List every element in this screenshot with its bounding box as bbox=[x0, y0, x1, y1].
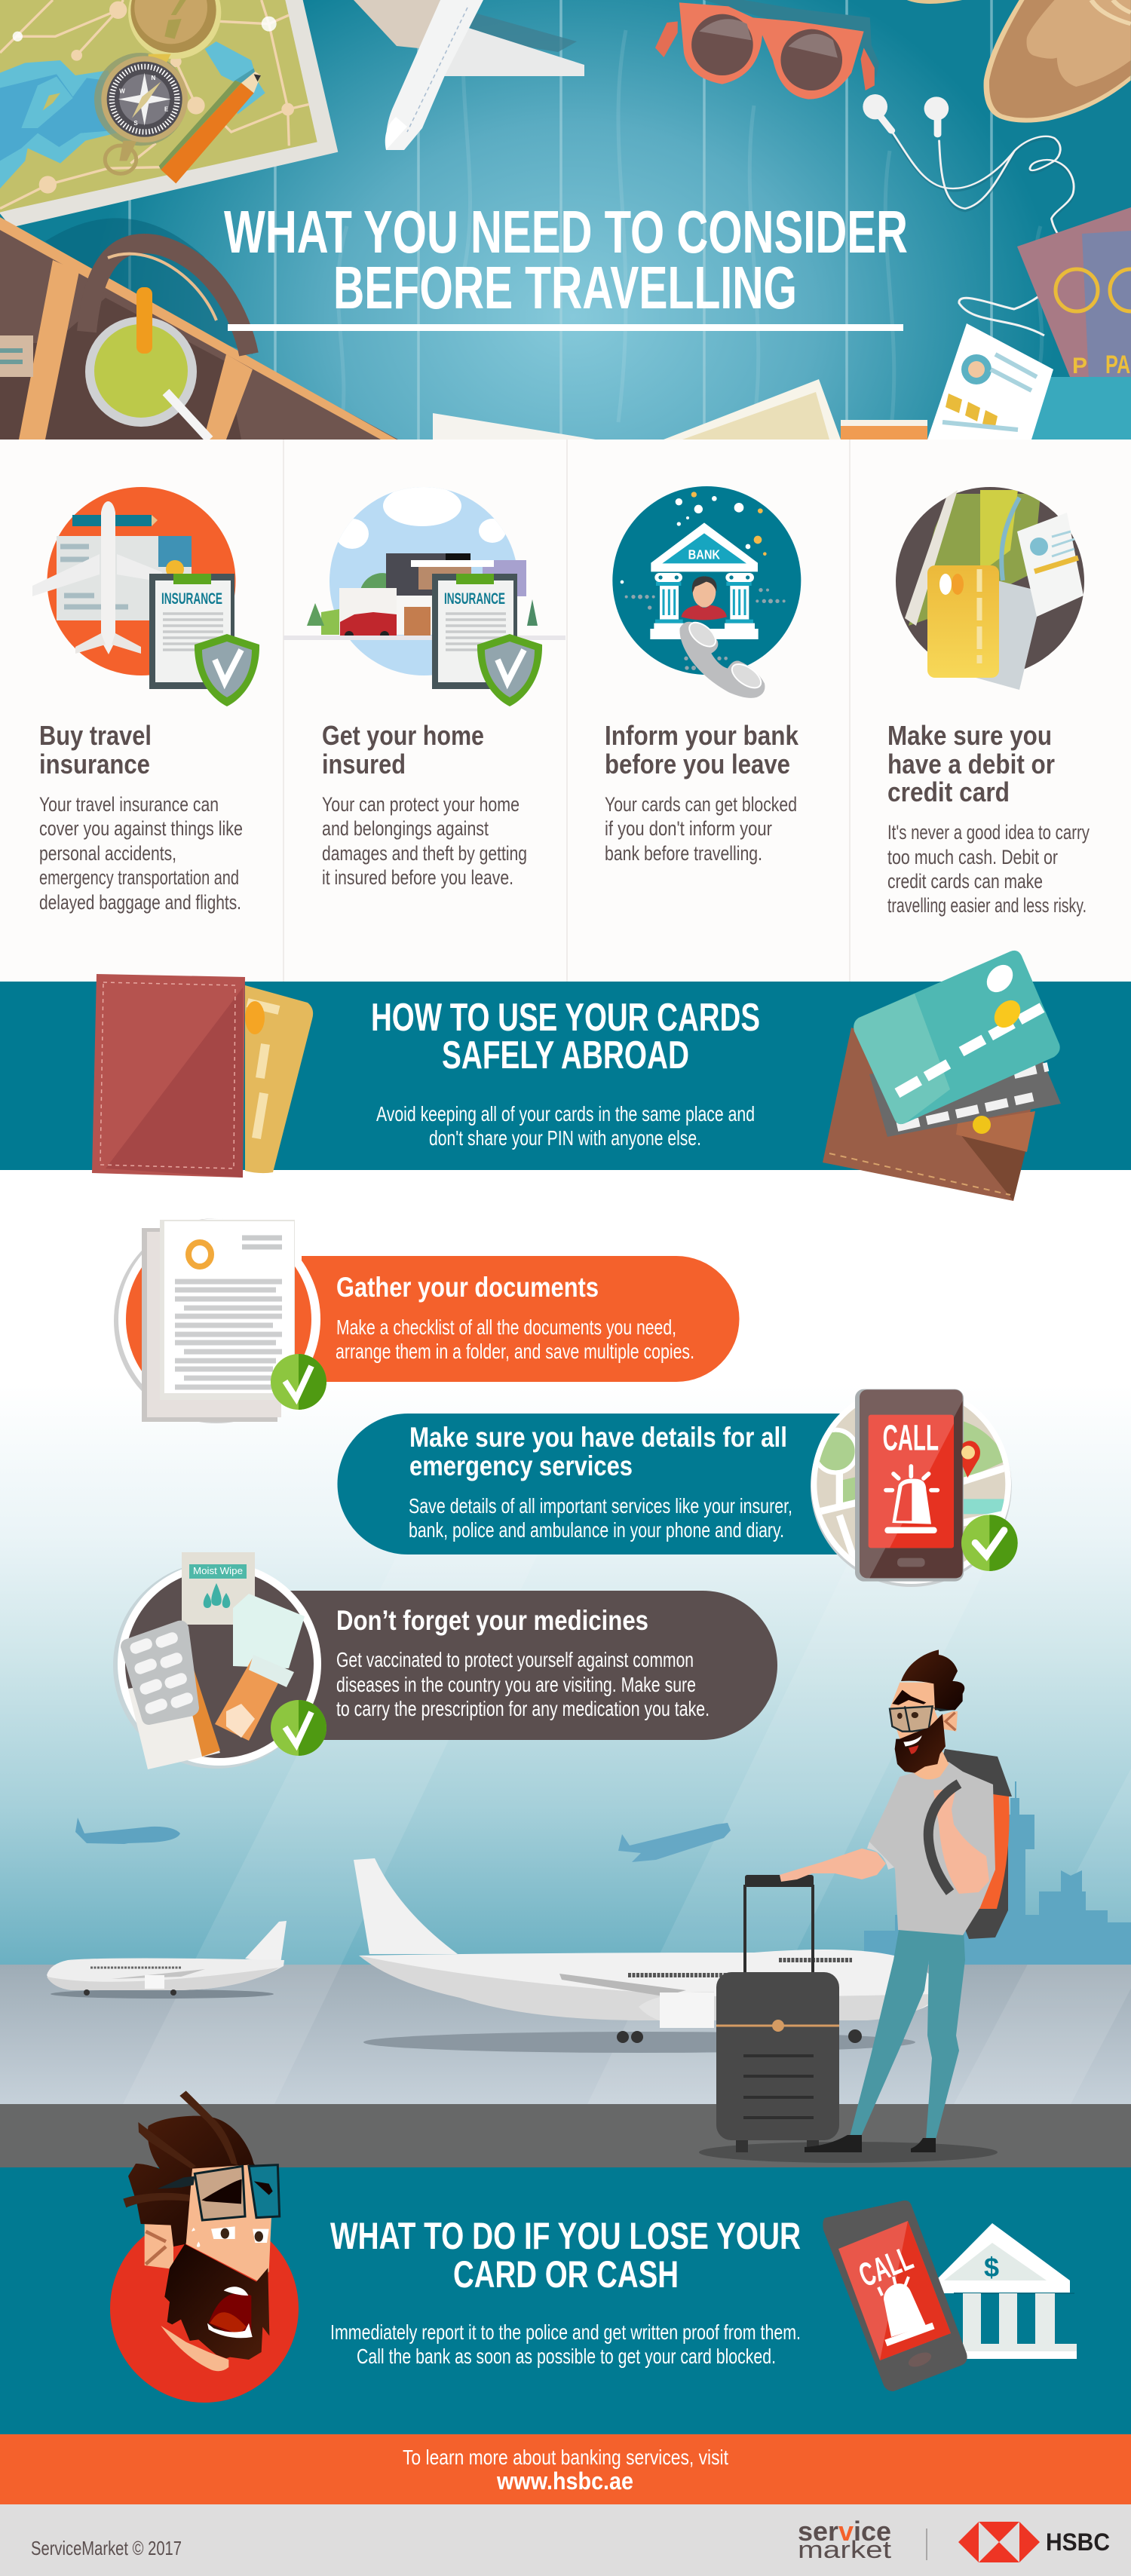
icon: suitcase bbox=[0, 217, 398, 440]
text block bbox=[376, 1102, 755, 1150]
icon: brown wallet and cards bbox=[823, 951, 1061, 1201]
icon: red wallet bbox=[92, 974, 313, 1178]
heading: before you leave bbox=[605, 749, 790, 780]
icon: check badge bbox=[271, 1354, 326, 1410]
text block: Your can protect your home bbox=[322, 793, 520, 816]
logo: servicemarket: market bbox=[798, 2536, 891, 2563]
heading bbox=[887, 720, 1055, 807]
heading: have a debit or bbox=[887, 749, 1055, 780]
text block: emergency transportation and bbox=[39, 866, 239, 889]
icon: passports: P bbox=[1072, 354, 1087, 378]
heading: insurance bbox=[39, 749, 150, 780]
icon: passports bbox=[1017, 207, 1131, 401]
heading: emergency services bbox=[409, 1450, 633, 1481]
check badge bbox=[961, 1515, 1018, 1571]
icon: id card bbox=[927, 323, 1131, 440]
shoes bbox=[805, 2135, 936, 2152]
icon: shoe, sunglasses and earphones bbox=[655, 0, 1131, 236]
heading: Buy travel bbox=[39, 720, 152, 751]
circle badge bbox=[114, 1218, 320, 1423]
text block: diseases in the country you are visiting. Make sure bbox=[336, 1673, 696, 1696]
icon: plane from above bbox=[354, 0, 584, 150]
text block: Immediately report it to the police and get written proof from them. bbox=[330, 2320, 801, 2344]
text block bbox=[336, 1648, 710, 1720]
shadow of traveller bbox=[699, 2142, 998, 2163]
heading bbox=[39, 720, 152, 780]
wooden table background bbox=[0, 0, 1131, 440]
logo: hsbc: HSBC bbox=[1046, 2529, 1110, 2556]
text block: Make a checklist of all the documents you need, bbox=[336, 1316, 676, 1339]
copyright: ServiceMarket © 2017 bbox=[31, 2537, 182, 2559]
earphones bbox=[878, 113, 1074, 236]
text block: Get vaccinated to protect yourself against common bbox=[336, 1648, 694, 1671]
text block: to carry the prescription for any medication you take. bbox=[336, 1697, 710, 1720]
heading: credit card bbox=[887, 776, 1010, 807]
text block: it insured before you leave. bbox=[322, 866, 513, 889]
text block: too much cash. Debit or bbox=[887, 846, 1058, 868]
legs bbox=[849, 1930, 965, 2140]
compass: E bbox=[164, 106, 169, 112]
text block: credit cards can make bbox=[887, 870, 1043, 893]
compass: S bbox=[133, 120, 138, 127]
icon: bank and telephone: BANK bbox=[688, 547, 720, 562]
circle badge bbox=[113, 1562, 321, 1769]
illustration: airport scene bbox=[47, 1649, 1131, 2163]
text block bbox=[39, 793, 243, 914]
logo: hsbc bbox=[958, 2522, 1110, 2562]
silhouette plane right bbox=[618, 1823, 731, 1862]
logo: servicemarket: service bbox=[798, 2516, 891, 2547]
icon: house and insurance clipboard bbox=[284, 485, 566, 706]
icon: bank and telephone bbox=[612, 486, 801, 698]
heading: Get your home bbox=[322, 720, 484, 751]
shirt bbox=[869, 1762, 995, 1935]
icon: bag handle bbox=[87, 244, 249, 354]
text block: cover you against things like bbox=[39, 817, 243, 840]
phone on map badge bbox=[811, 1384, 1018, 1587]
icon: bank bbox=[936, 2223, 1077, 2359]
pencil bbox=[159, 69, 261, 183]
map circle bbox=[811, 1384, 1012, 1587]
text block: if you don't inform your bbox=[605, 817, 772, 840]
strap bbox=[928, 1784, 959, 1892]
suitcase bbox=[716, 1875, 839, 2152]
icon: medicines bbox=[121, 1552, 305, 1769]
heading bbox=[371, 996, 760, 1077]
text block: bank, police and ambulance in your phone and diary. bbox=[409, 1518, 784, 1542]
heading: WHAT TO DO IF YOU LOSE YOUR bbox=[330, 2215, 801, 2257]
text block: Call the bank as soon as possible to get your card blocked. bbox=[357, 2345, 776, 2368]
icon: map and compass bbox=[0, 0, 338, 228]
icon: drink bbox=[85, 287, 210, 440]
icon: house and insurance clipboard: INSURANCE bbox=[444, 590, 505, 608]
icon: phone: CALL bbox=[854, 2240, 918, 2294]
panel: inform bank bbox=[605, 486, 801, 865]
heading: SAFELY ABROAD bbox=[442, 1034, 689, 1077]
text block: bank before travelling. bbox=[605, 842, 762, 865]
heading: HOW TO USE YOUR CARDS bbox=[371, 996, 760, 1040]
small airplane bbox=[47, 1921, 287, 1999]
icon: plane and insurance clipboard: INSURANCE bbox=[161, 590, 222, 608]
text block bbox=[322, 793, 527, 889]
heading: Make sure you bbox=[887, 720, 1052, 751]
arm holding strap bbox=[933, 1788, 989, 1894]
text block: To learn more about banking services, visit bbox=[403, 2446, 728, 2469]
compass bbox=[94, 53, 188, 173]
icon: cards on map bbox=[896, 487, 1084, 690]
panel: debit or credit card bbox=[887, 487, 1090, 917]
phone: CALL bbox=[883, 1417, 939, 1458]
heading bbox=[409, 1422, 787, 1481]
title underline bbox=[228, 324, 903, 331]
compass: N bbox=[151, 75, 155, 81]
large airplane bbox=[354, 1858, 938, 2053]
header panel bbox=[0, 0, 1131, 440]
map sheet bbox=[0, 0, 338, 228]
text block bbox=[409, 1494, 792, 1542]
heading bbox=[322, 720, 484, 780]
heading: CARD OR CASH bbox=[453, 2253, 679, 2296]
shoe bbox=[907, 0, 1131, 123]
compass: W bbox=[119, 87, 125, 94]
panel: home insured bbox=[284, 485, 566, 889]
pill background bbox=[338, 1414, 905, 1554]
icon: photos on table bbox=[433, 379, 927, 440]
heading: Make sure you have details for all bbox=[409, 1422, 787, 1453]
pill background bbox=[302, 1256, 740, 1382]
icon: medicines: Moist Wipe bbox=[193, 1565, 243, 1576]
heading bbox=[605, 720, 799, 780]
text block: damages and theft by getting bbox=[322, 842, 527, 865]
magnifier lid bbox=[128, 0, 221, 59]
panel: buy travel insurance bbox=[32, 487, 259, 914]
text block bbox=[336, 1316, 694, 1363]
text block: personal accidents, bbox=[39, 842, 176, 865]
sky and airport background bbox=[0, 1170, 1131, 2167]
logo: servicemarket bbox=[798, 2516, 891, 2563]
text block: arrange them in a folder, and save multiple copies. bbox=[336, 1340, 694, 1363]
backpack bbox=[929, 1749, 1012, 1939]
phone bbox=[855, 1389, 964, 1582]
map pin bbox=[961, 1441, 980, 1478]
icon: check badge bbox=[271, 1700, 326, 1756]
city skyline bbox=[864, 1781, 1131, 1965]
icon: bank: $ bbox=[984, 2252, 999, 2283]
text block: delayed baggage and flights. bbox=[39, 891, 241, 914]
pill background bbox=[289, 1591, 777, 1740]
link: www.hsbc.ae bbox=[496, 2467, 633, 2495]
heading bbox=[330, 2215, 801, 2296]
silhouette plane left bbox=[75, 1818, 180, 1844]
icon: phone bbox=[823, 2201, 967, 2391]
text block: Save details of all important services like your insurer, bbox=[409, 1494, 792, 1518]
traveller bbox=[780, 1649, 1012, 2152]
panel: medicines bbox=[113, 1552, 777, 1769]
head bbox=[890, 1649, 964, 1779]
sunglasses bbox=[655, 0, 879, 100]
panel: footer bbox=[0, 2504, 1131, 2576]
text block bbox=[887, 821, 1090, 917]
heading: Gather your documents bbox=[336, 1272, 599, 1303]
heading: Don’t forget your medicines bbox=[336, 1605, 648, 1636]
text block: and belongings against bbox=[322, 817, 489, 840]
panel: gather your documents bbox=[114, 1218, 740, 1423]
title: BEFORE TRAVELLING bbox=[333, 254, 797, 321]
text block: Avoid keeping all of your cards in the same place and bbox=[376, 1102, 755, 1126]
heading: insured bbox=[322, 749, 406, 780]
panel: lose your card or cash bbox=[0, 2091, 1131, 2434]
panel: four tips bbox=[0, 440, 1131, 982]
icon: plane and insurance clipboard bbox=[32, 487, 259, 706]
heading: Inform your bank bbox=[605, 720, 799, 751]
icon: shouting face bbox=[110, 2091, 299, 2403]
panel: learn more bbox=[0, 2434, 1131, 2504]
panel: how to use your cards bbox=[0, 951, 1131, 1201]
arm on suitcase bbox=[780, 1849, 886, 1882]
text block: Your travel insurance can bbox=[39, 793, 219, 816]
title bbox=[224, 198, 908, 321]
divider bbox=[926, 2529, 927, 2560]
text block bbox=[330, 2320, 801, 2368]
text block bbox=[605, 793, 797, 865]
panel: emergency services bbox=[338, 1384, 1018, 1587]
sleeve cuff bbox=[867, 1842, 894, 1870]
icon: documents bbox=[142, 1220, 295, 1422]
text block: don't share your PIN with anyone else. bbox=[429, 1126, 701, 1150]
text block: Your cards can get blocked bbox=[605, 793, 797, 816]
icon: second cable bbox=[959, 260, 1090, 335]
